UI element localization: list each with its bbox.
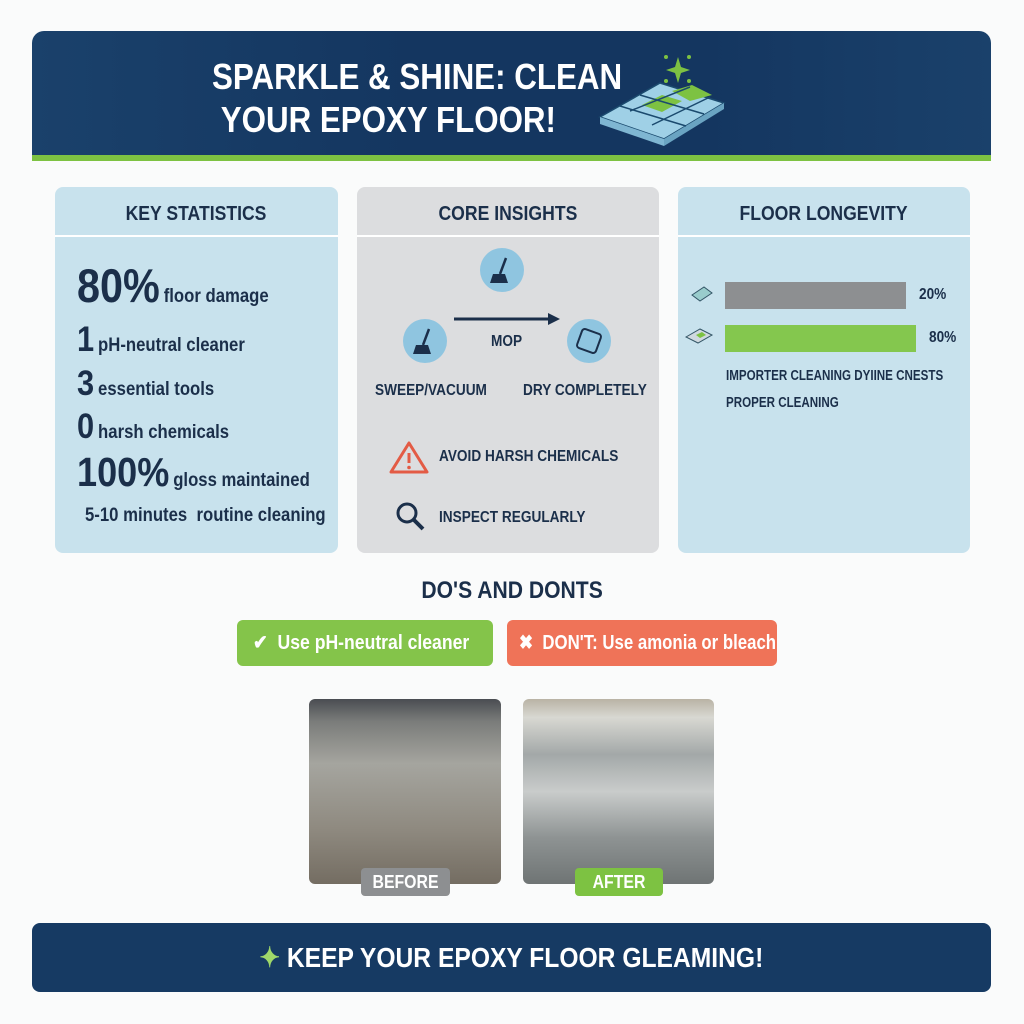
- legend text: IMPORTER CLEANING DYIINE CNESTS: [726, 368, 943, 384]
- title: SPARKLE & SHINE: CLEAN: [212, 56, 622, 97]
- heading: do's and donts: DO'S AND DONTS: [421, 577, 603, 604]
- panel: key statistics: 100% gloss maintained: [77, 449, 310, 495]
- footer banner: ✦ KEEP YOUR EPOXY FLOOR GLEAMING!: [260, 942, 763, 973]
- bar chart: [685, 282, 956, 352]
- header banner: [32, 31, 991, 161]
- dont button: ✖ DON'T: Use amonia or bleach: [519, 632, 776, 654]
- panel: floor longevity: [678, 187, 970, 553]
- inspect tip: INSPECT REGULARLY: [439, 509, 586, 526]
- heading: FLOOR LONGEVITY: [740, 203, 908, 225]
- panel: key statistics: 3 essential tools: [77, 364, 214, 403]
- photo: after: [523, 699, 714, 884]
- legend text: PROPER CLEANING: [726, 395, 839, 411]
- label: before: BEFORE: [372, 872, 438, 892]
- panel: key statistics: 5-10 minutes routine cleaning: [85, 505, 326, 526]
- heading: [678, 187, 970, 237]
- do button: ✔ Use pH-neutral cleaner: [253, 632, 469, 654]
- bar chart: 80%: [929, 329, 956, 346]
- panel: core insights: [357, 187, 659, 553]
- bar chart: 20%: [919, 286, 946, 303]
- heading: CORE INSIGHTS: [439, 203, 577, 225]
- photo: before: [309, 699, 501, 884]
- panel: key statistics: [55, 187, 338, 553]
- icon: floor tiles with sparkle: [598, 55, 726, 146]
- dont button: [507, 620, 777, 666]
- footer banner: [32, 923, 991, 992]
- heading: KEY STATISTICS: [126, 203, 267, 225]
- panel: key statistics: 80% floor damage: [77, 259, 269, 312]
- warning tip: AVOID HARSH CHEMICALS: [439, 448, 618, 465]
- legend text: [726, 368, 943, 411]
- panel: key statistics: 0 harsh chemicals: [77, 407, 229, 446]
- label: after: [575, 868, 663, 896]
- label: after: AFTER: [593, 872, 645, 892]
- title: [212, 56, 622, 140]
- warning tip: [390, 441, 618, 474]
- flow diagram: MOP: [491, 333, 522, 350]
- do button: [237, 620, 493, 666]
- heading: [357, 187, 659, 237]
- stats list: [77, 259, 326, 526]
- label: before: [361, 868, 450, 896]
- panel: key statistics: 1 pH-neutral cleaner: [77, 320, 245, 359]
- heading: [55, 187, 338, 237]
- flow diagram: SWEEP/VACUUM: [375, 382, 487, 399]
- inspect tip: [396, 502, 586, 530]
- flow diagram: [375, 248, 647, 399]
- flow diagram: DRY COMPLETELY: [523, 382, 647, 399]
- title: YOUR EPOXY FLOOR!: [221, 99, 556, 140]
